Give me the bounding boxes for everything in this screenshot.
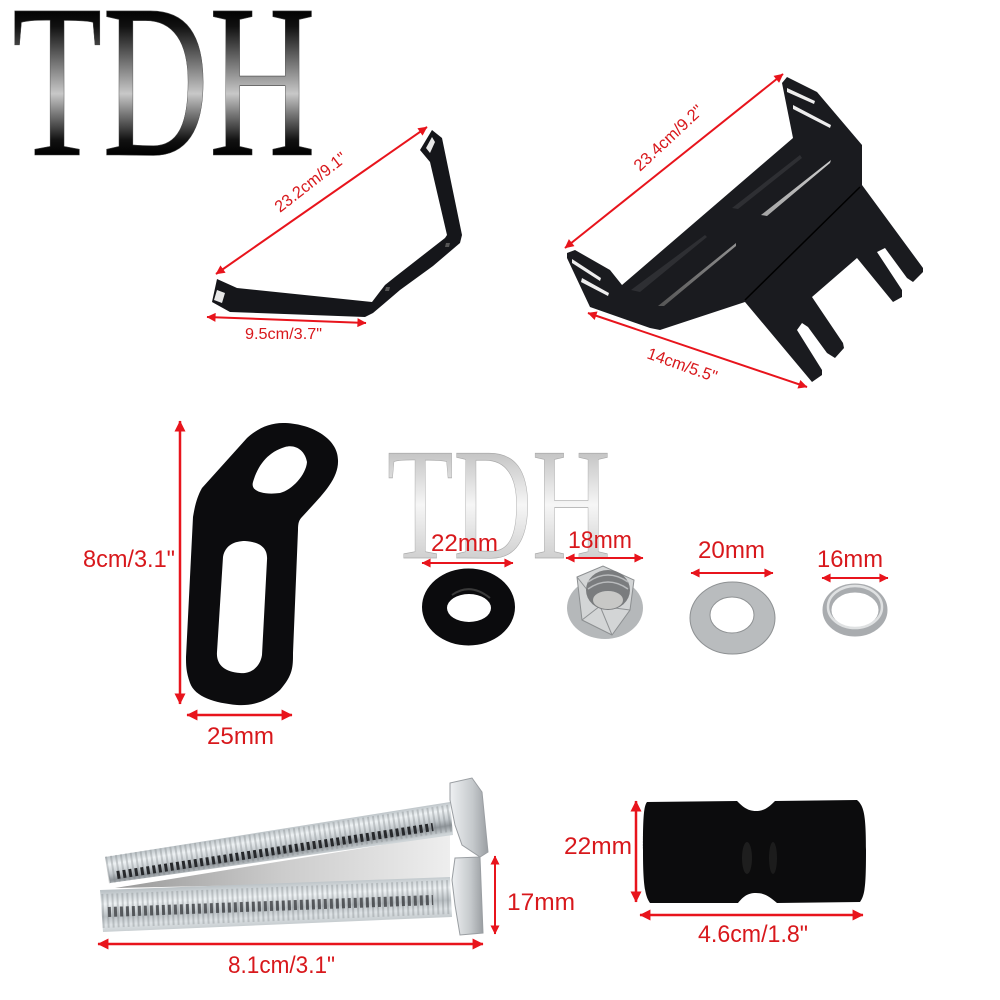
dimension: 25mm	[187, 715, 292, 750]
dimension: 23.2cm/9.1": 23.2cm/9.1"	[271, 149, 350, 216]
part: flange nut	[567, 566, 643, 639]
dimension: 8.1cm/3.1": 8.1cm/3.1"	[228, 952, 335, 979]
dimension: 22mm	[422, 530, 513, 563]
watermark: TDH: TDH	[387, 415, 611, 593]
dimension: 22mm (spacer): 22mm	[564, 833, 632, 860]
dimension: 9.5cm/3.7": 9.5cm/3.7"	[245, 326, 322, 343]
dimension: 22mm (spacer)	[564, 801, 636, 902]
dimension: 14cm/5.5": 14cm/5.5"	[645, 345, 720, 386]
dimension: 9.5cm/3.7"	[207, 317, 366, 343]
dimension: 20mm	[691, 537, 773, 573]
dimension: 23.2cm/9.1"	[216, 127, 427, 274]
part: narrow curved bracket	[212, 130, 462, 317]
dimension: 22mm: 22mm	[431, 530, 498, 557]
part: spring washer	[827, 586, 883, 632]
part: flat washer	[690, 582, 775, 654]
dimension: 14cm/5.5"	[588, 313, 807, 387]
dimension: 17mm: 17mm	[507, 889, 575, 916]
part: wide slotted bracket	[567, 77, 923, 382]
part: upper bolt	[105, 778, 488, 883]
dimension: 4.6cm/1.8": 4.6cm/1.8"	[698, 921, 808, 948]
part: black washer	[422, 568, 515, 646]
dimension: 23.4cm/9.2": 23.4cm/9.2"	[630, 102, 707, 175]
dimension: 23.4cm/9.2"	[565, 74, 783, 248]
dimension: 8cm/3.1": 8cm/3.1"	[83, 546, 175, 573]
dimension: 16mm: 16mm	[817, 546, 883, 573]
part: slotted plate	[186, 423, 338, 705]
part: black spacer	[643, 800, 866, 903]
dimension: 20mm: 20mm	[698, 537, 765, 564]
part: shadow between bolts	[115, 834, 450, 888]
part: lower bolt	[100, 857, 483, 935]
dimension: 25mm: 25mm	[207, 723, 274, 750]
dimension: 18mm: 18mm	[568, 527, 632, 554]
dimension: 17mm	[495, 856, 575, 934]
